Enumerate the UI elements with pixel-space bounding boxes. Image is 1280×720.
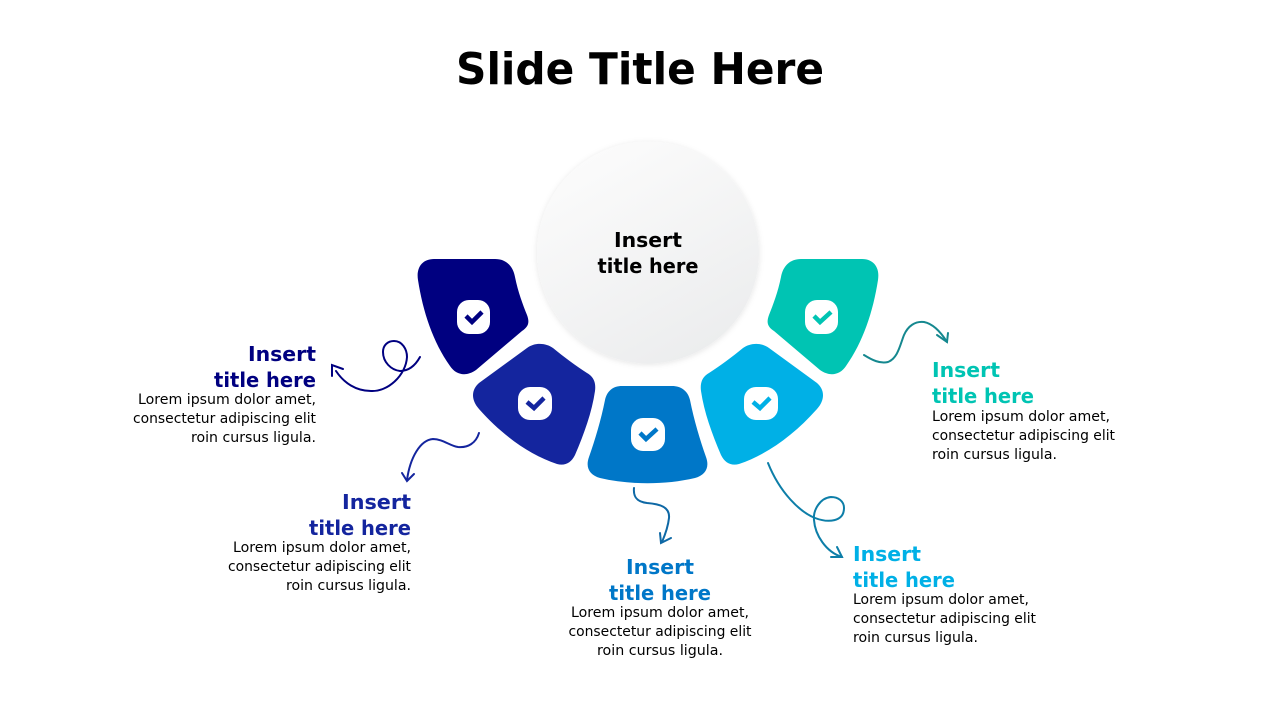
text block: teal: Lorem ipsum dolor amet,: [932, 409, 1110, 425]
text block: royal blue: title here: [309, 516, 411, 540]
text block: light blue: Insert: [853, 542, 921, 566]
center circle: Insert: [614, 228, 682, 252]
text block: royal blue: consectetur adipiscing elit: [228, 559, 411, 575]
text block: royal blue: Lorem ipsum dolor amet,: [233, 540, 411, 556]
text block: light blue: [853, 542, 1036, 646]
segment 5: teal: [768, 259, 878, 374]
center circle: title here: [598, 254, 698, 278]
text block: light blue: title here: [853, 568, 955, 592]
center circle: [537, 142, 759, 364]
text block: royal blue: [228, 490, 411, 594]
segment 4: light blue: [701, 344, 823, 465]
text block: teal: roin cursus ligula.: [932, 447, 1057, 463]
text block: blue: Lorem ipsum dolor amet,: [571, 605, 749, 621]
text block: light blue: consectetur adipiscing elit: [853, 611, 1036, 627]
segment 2: royal blue: [473, 344, 595, 465]
text block: blue: title here: [609, 581, 711, 605]
segment 1: navy: [418, 259, 528, 374]
arrow: royal blue: [402, 433, 479, 481]
text block: blue: Insert: [626, 555, 694, 579]
text block: blue: consectetur adipiscing elit: [568, 624, 752, 640]
text block: navy: title here: [214, 368, 316, 392]
text block: royal blue: Insert: [342, 490, 411, 514]
text block: light blue: Lorem ipsum dolor amet,: [853, 592, 1029, 608]
arrow: navy looped: [332, 341, 420, 391]
arrow: teal: [864, 322, 948, 363]
arrow: light blue looped: [768, 463, 844, 557]
text block: navy: Lorem ipsum dolor amet,: [138, 392, 316, 408]
text block: royal blue: roin cursus ligula.: [286, 578, 411, 594]
text block: teal: [932, 358, 1115, 463]
text block: teal: consectetur adipiscing elit: [932, 428, 1115, 444]
arrow: blue: [634, 488, 671, 543]
text block: light blue: roin cursus ligula.: [853, 630, 978, 646]
title: Slide Title Here: [456, 44, 824, 95]
text block: navy: roin cursus ligula.: [191, 430, 316, 446]
text block: blue: roin cursus ligula.: [597, 643, 723, 659]
text block: teal: Insert: [932, 358, 1000, 382]
text block: navy: Insert: [248, 342, 316, 366]
text block: navy: [133, 342, 316, 446]
segment 3: blue: [588, 386, 707, 483]
text block: blue: [568, 555, 752, 659]
text block: teal: title here: [932, 384, 1034, 408]
text block: navy: consectetur adipiscing elit: [133, 411, 316, 427]
